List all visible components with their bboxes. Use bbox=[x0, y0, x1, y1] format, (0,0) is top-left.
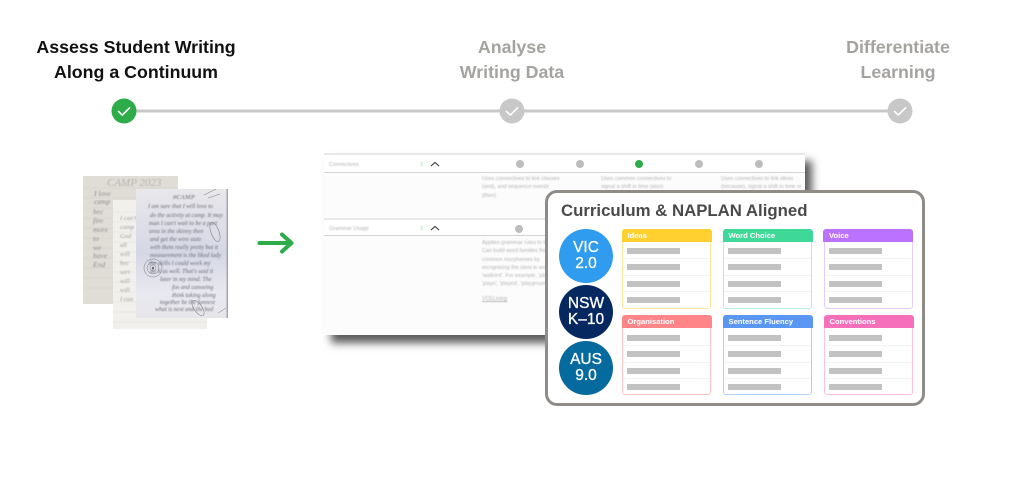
text: connectives level 4: Uses connectives to link ideas bbox=[721, 176, 793, 182]
student writing samples bbox=[83, 176, 228, 329]
paper 2: I can bbox=[119, 296, 133, 303]
heading: assess student writing: Assess Student Writing bbox=[36, 37, 236, 57]
paper 3: man I can't wait to be a part bbox=[149, 221, 217, 227]
card: conventions: Conventions bbox=[830, 316, 876, 326]
card: sentence fluency bbox=[723, 315, 812, 395]
link: VCEiLiving: VCELiving bbox=[482, 296, 507, 302]
paper 3: with them really pretty but it bbox=[150, 245, 218, 251]
text: connectives descriptors: Uses connectives to link clauses bbox=[482, 176, 560, 182]
card: voice bbox=[824, 229, 912, 309]
card: sentence fluency: Sentence Fluency bbox=[728, 316, 793, 326]
paper 3: do the activity at camp. It may bbox=[150, 213, 223, 219]
text: grammar descriptors: 'walk/ed'. For example, 'play', bbox=[482, 273, 552, 279]
paper 3: what is next and the bed bbox=[155, 307, 214, 313]
card: conventions bbox=[824, 315, 913, 395]
text: grammar descriptors: Applies grammar rules to text. bbox=[482, 240, 554, 246]
step 3 check bbox=[888, 98, 912, 124]
text: grammar descriptors bbox=[482, 240, 554, 287]
text: connectives level 3: signal a shift in time (also) bbox=[601, 184, 663, 190]
text: grammar descriptors: Can build word families from bbox=[482, 248, 550, 254]
badge: VIC 2.0: 2.0 bbox=[575, 255, 597, 272]
row: connectives: 3 bbox=[420, 162, 423, 168]
paper 1: have bbox=[93, 251, 108, 260]
text: connectives level 4: (because), signal a shift in time or bbox=[721, 184, 802, 190]
top divider bbox=[324, 153, 805, 154]
paper 1: CAMP 2023 bbox=[107, 177, 162, 189]
paper 1: to bbox=[93, 234, 99, 243]
paper 3: area in the skinny then bbox=[149, 229, 203, 235]
paper 1: fire bbox=[93, 216, 104, 225]
badge: NSW K-10: NSW bbox=[568, 294, 604, 312]
paper 2: I can't bbox=[119, 215, 137, 222]
heading: differentiate learning: Differentiate bbox=[846, 37, 950, 57]
text: connectives descriptors: (then) bbox=[482, 193, 496, 199]
paper 1: more bbox=[93, 225, 109, 234]
paper 2: God bbox=[120, 233, 132, 240]
badge: NSW K-10: K–10 bbox=[568, 311, 604, 328]
row: grammar usage bbox=[324, 220, 805, 236]
heading: analyse writing data bbox=[460, 37, 564, 82]
paper 2: all bbox=[120, 242, 127, 249]
paper 1 bbox=[83, 176, 178, 304]
paper 2: seri bbox=[120, 269, 130, 276]
text: connectives descriptors bbox=[482, 176, 560, 199]
text: grammar descriptors: common morphemes by bbox=[482, 257, 540, 263]
text: connectives descriptors: (and), and sequence events bbox=[482, 184, 549, 190]
card: voice: Voice bbox=[829, 230, 849, 240]
step 2 check bbox=[500, 98, 524, 124]
divider: between rows bbox=[324, 218, 805, 220]
card: ideas: Ideas bbox=[628, 230, 647, 240]
arrow: green pointing right bbox=[258, 232, 294, 254]
row: grammar usage: 3 bbox=[420, 226, 423, 232]
card: organisation: Organisation bbox=[628, 316, 674, 326]
badge: AUS 9.0 bbox=[559, 341, 613, 395]
paper 2 bbox=[113, 200, 207, 329]
card: word choice bbox=[723, 229, 812, 309]
timeline with three check steps bbox=[112, 98, 912, 124]
badge: VIC 2.0: VIC bbox=[573, 238, 599, 256]
heading: assess student writing: Along a Continuum bbox=[54, 62, 218, 82]
panel title: Curriculum & NAPLAN Aligned bbox=[561, 201, 807, 220]
badge: AUS 9.0: AUS bbox=[570, 350, 602, 368]
badge: NSW K-10 bbox=[559, 285, 613, 339]
text: connectives level 3 bbox=[600, 176, 672, 190]
paper 1: I love bbox=[93, 189, 112, 198]
paper 3: and get the wire state bbox=[150, 237, 202, 243]
row: connectives bbox=[324, 155, 805, 173]
heading: assess student writing bbox=[36, 37, 236, 82]
paper 3: #CAMP bbox=[172, 194, 196, 201]
text: connectives level 3: Uses common connectives to bbox=[601, 176, 671, 182]
paper 3: think taking along bbox=[172, 293, 216, 299]
badge: AUS 9.0: 9.0 bbox=[575, 367, 597, 384]
paper 2: camp bbox=[120, 224, 135, 231]
heading: differentiate learning: Learning bbox=[860, 62, 936, 82]
panel: curriculum and NAPLAN aligned bbox=[545, 190, 925, 406]
paper 1: End bbox=[92, 260, 105, 269]
doodles bbox=[144, 189, 226, 318]
paper 1: we bbox=[93, 243, 102, 252]
card: organisation bbox=[622, 315, 711, 395]
panel: writing continuum data bbox=[324, 153, 805, 335]
paper 2: bec bbox=[120, 260, 129, 267]
paper 3: together be the funnest bbox=[160, 299, 215, 306]
heading: differentiate learning bbox=[846, 37, 950, 82]
paper 3: fox and canoeing bbox=[172, 284, 213, 291]
text: connectives level 4 bbox=[720, 176, 802, 190]
paper 3: do it as well. That's said it bbox=[150, 269, 213, 275]
row: connectives: Connectives bbox=[329, 162, 359, 168]
paper 3: measurement is the liked lady bbox=[150, 253, 221, 259]
paper 3: later in my mind. The bbox=[160, 277, 212, 283]
paper 3: I am sure that I will love to bbox=[147, 204, 213, 210]
step 1 check: active bbox=[112, 98, 136, 124]
paper 3 bbox=[136, 189, 228, 318]
text: grammar descriptors: recognising the stem in words bbox=[482, 265, 553, 271]
card: word choice: Word Choice bbox=[728, 230, 775, 240]
paper 2: will bbox=[120, 287, 130, 294]
badge: VIC 2.0 bbox=[559, 229, 613, 283]
heading: analyse writing data: Writing Data bbox=[460, 62, 564, 82]
paper 1: camp bbox=[94, 197, 110, 206]
paper 1: bec bbox=[93, 207, 104, 216]
text: grammar descriptors: 'plays', 'played', 'playground'. bbox=[482, 281, 551, 287]
paper 2: will bbox=[120, 278, 130, 285]
card: ideas bbox=[622, 229, 711, 309]
row: grammar usage: Grammar Usage bbox=[329, 226, 369, 232]
paper 2: will bbox=[120, 251, 130, 258]
heading: analyse writing data: Analyse bbox=[478, 37, 546, 57]
paper 3: the skills I could work my bbox=[149, 261, 211, 267]
